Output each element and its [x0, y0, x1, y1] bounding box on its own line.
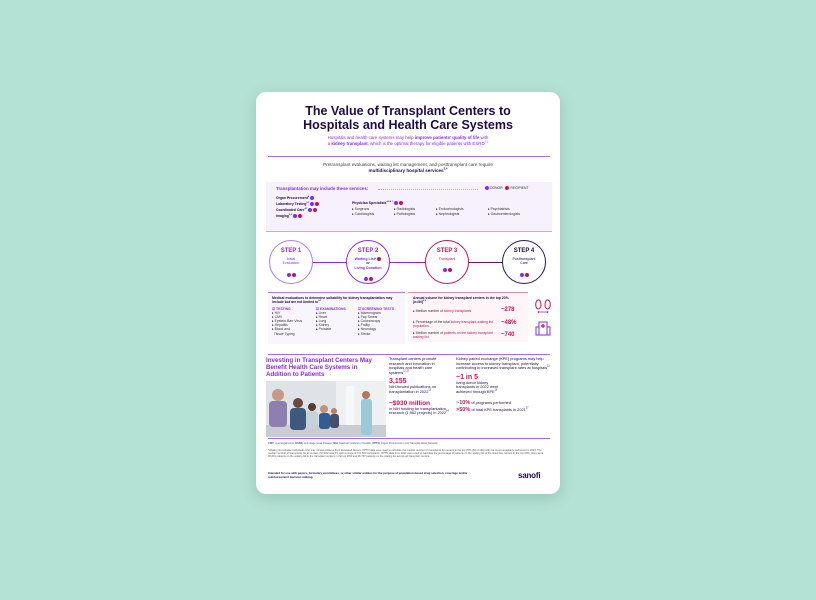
step 3 [425, 240, 469, 284]
column: research: NIH-funded publications on transplantation in 202213 [389, 384, 436, 394]
panel: annual volume: Annual volume for kidney transplant centers in the top 20% (n=50)8,9 [413, 296, 509, 304]
physician specialists: Physician Specialists4,5,6,7 [352, 201, 393, 205]
step 1: Evaluation [283, 261, 299, 265]
icon: kidneys [535, 299, 551, 314]
screening list: ☑ SCREENING TESTS [358, 307, 394, 311]
examinations list: ▸ Prostate [316, 327, 331, 331]
screening list: ▸ Mammogram [358, 311, 381, 315]
panel: annual volume [408, 292, 528, 342]
testing list [272, 307, 302, 336]
screening list: ▸ Frailty [358, 323, 370, 327]
column: KPE: living donor kidney [456, 380, 488, 385]
physician specialists: ▸ Psychiatrists [488, 206, 510, 210]
service list: Organ Procurement8 [276, 196, 309, 200]
intro text: multidisciplinary hospital services3,4 [369, 167, 447, 173]
panel: medical evaluations: Medical evaluations to determine suitability for kidney transplantation may include but are not limited to5-7 [272, 296, 392, 304]
panel: annual volume: ▸ Median number of patients on the kidney transplant waiting list [413, 331, 493, 339]
column: research [389, 356, 449, 415]
testing list: ☑ TESTING [272, 307, 291, 311]
panel: services [266, 182, 552, 232]
service list [276, 196, 319, 218]
intro text [323, 162, 493, 173]
screening list: ▸ Neurology [358, 327, 376, 331]
testing list: ▸ CMV [272, 315, 282, 319]
step 2: Living Donation [354, 266, 382, 270]
physician specialists: ▸ Surgeons [352, 206, 369, 210]
screening list: ▸ Pap Smear [358, 315, 378, 319]
column: research: ~$930 million [389, 400, 430, 407]
service list: Coordinated Care4,7 [276, 208, 307, 212]
testing list: ▸ Hepatitis [272, 323, 288, 327]
service list: Imaging5,6 [276, 214, 292, 218]
testing list: ▸ HIV [272, 311, 280, 315]
panel: medical evaluations [268, 292, 405, 344]
panel: annual volume: ~278 [501, 307, 515, 313]
step 2: or [366, 261, 370, 265]
title [303, 104, 513, 132]
subtitle: Hospitals and health care systems may help improve patients' quality of life with [328, 135, 488, 140]
testing list: ▸ Epstein-Barr Virus [272, 319, 302, 323]
photo: patients waiting [266, 381, 386, 437]
physician specialists: ▸ Cardiologists [352, 212, 374, 216]
examinations list [316, 307, 346, 331]
physician specialists: ▸ Nephrologists [436, 212, 459, 216]
title: Hospitals and Health Care Systems [303, 118, 513, 132]
footnotes [268, 442, 544, 458]
column: KPE [456, 356, 550, 413]
footnotes: CMV, cytomegalovirus; ESRD, end-stage renal disease; NIH, National Institutes of Health; OPTN, Organ Procurement and Transplantation Network. [268, 442, 438, 445]
step 2: Waiting List* [355, 257, 376, 261]
examinations list: ▸ Heart [316, 315, 327, 319]
column: research: in NIH funding for transplantation research (1,962 projects) in 202214 [389, 406, 449, 415]
physician specialists: ▸ Radiologists [394, 206, 415, 210]
testing list: ▸ Blood and [272, 327, 290, 331]
title: The Value of Transplant Centers to [305, 104, 511, 118]
footnotes: *Waiting list includes individuals who may receive kidneys from deceased donors. OPTN data were used to calculate the median number of transplants for centers in the top 20% (50 of 249) with the most transplants performed in 2023. The median number of transplants for all centers (N=249) was 74, with a range of 0 to 500 transplants. OPTN data from 2024 were used to calculate the percentage of patients on the waiting list of the listed two centers in the top 20%; there were 46,601 patients on the waiting list in the transplant centers in the top 20% and 96,797 patients on the waiting list across all transplant centers. [268, 449, 543, 458]
column: KPE: >50% of total KPE transplants in 202117 [456, 407, 528, 413]
step 1: Initial [287, 257, 295, 261]
step 1 [269, 240, 313, 284]
column: KPE: achieved through KPE16 [456, 389, 497, 394]
screening list: ▸ Colonoscopy [358, 319, 380, 323]
step 3: STEP 3 [437, 248, 457, 254]
panel: annual volume: ~740 [501, 332, 515, 338]
panel: annual volume: ▸ Percentage of the total kidney transplant waiting list population [413, 320, 493, 328]
legend: DONOR RECIPIENT [490, 186, 528, 190]
screening list: ▸ Stroke [358, 332, 370, 336]
card [256, 92, 560, 494]
column: research: Transplant centers promote research and innovation in hospitals and health care systems11,12 [389, 356, 436, 375]
examinations list: ▸ Liver [316, 311, 326, 315]
column: research: 3,155 [389, 378, 407, 385]
column: KPE: transplants in 2022 were [456, 384, 498, 389]
step 2: STEP 2 [358, 248, 378, 254]
stat rows: ▸ Median number of kidney transplants [413, 309, 471, 313]
step 2 [346, 240, 390, 284]
subtitle [328, 135, 488, 146]
examinations list: ▸ Lung [316, 319, 326, 323]
column: KPE: Kidney paired exchange (KPE) programs may help increase access to kidney transplant, potentially contributing to increased transplant rates at hospitals15 [456, 356, 550, 370]
step 1: STEP 1 [281, 248, 301, 254]
physician specialists: ▸ Gastroenterologists [488, 212, 520, 216]
services heading: Transplantation may include these services: [276, 186, 368, 191]
step 4 [502, 240, 546, 284]
intro text: Pretransplant evaluations, waiting list management, and posttransplant care require [323, 162, 493, 167]
column: KPE: ~1 in 5 [456, 374, 478, 381]
physician specialists [352, 200, 520, 216]
disclaimer: Intended for use with payers, formulary committees, or other similar entities for the purpose of population-based drug selection, coverage and/or reimbursement decision making. [268, 471, 468, 479]
screening list [358, 307, 394, 336]
testing list: Tissue Typing [274, 332, 295, 336]
physician specialists: ▸ Pathologists [394, 212, 415, 216]
step 4: Care [520, 261, 528, 265]
subtitle: a kidney transplant, which is the optimal therapy for eligible patients with ESRD1,2 [328, 140, 488, 146]
step 3: Transplant [439, 257, 455, 261]
column: KPE: ~10% of programs performed [456, 400, 511, 406]
step connector line [291, 262, 525, 263]
examinations list: ☑ EXAMINATIONS [316, 307, 346, 311]
service list: Laboratory Testing5,7 [276, 202, 309, 206]
physician specialists: ▸ Endocrinologists [436, 206, 464, 210]
logo: sanofi: sanofi [518, 471, 540, 480]
panel: annual volume: ~48% [501, 320, 517, 326]
step 4: Posttransplant [512, 257, 535, 261]
step 4: STEP 4 [514, 248, 534, 254]
icon: hospital [536, 322, 550, 336]
examinations list: ▸ Kidney [316, 323, 329, 327]
section heading: investing: Investing in Transplant Centers May Benefit Health Care Systems in Addition to Patients [266, 357, 372, 378]
